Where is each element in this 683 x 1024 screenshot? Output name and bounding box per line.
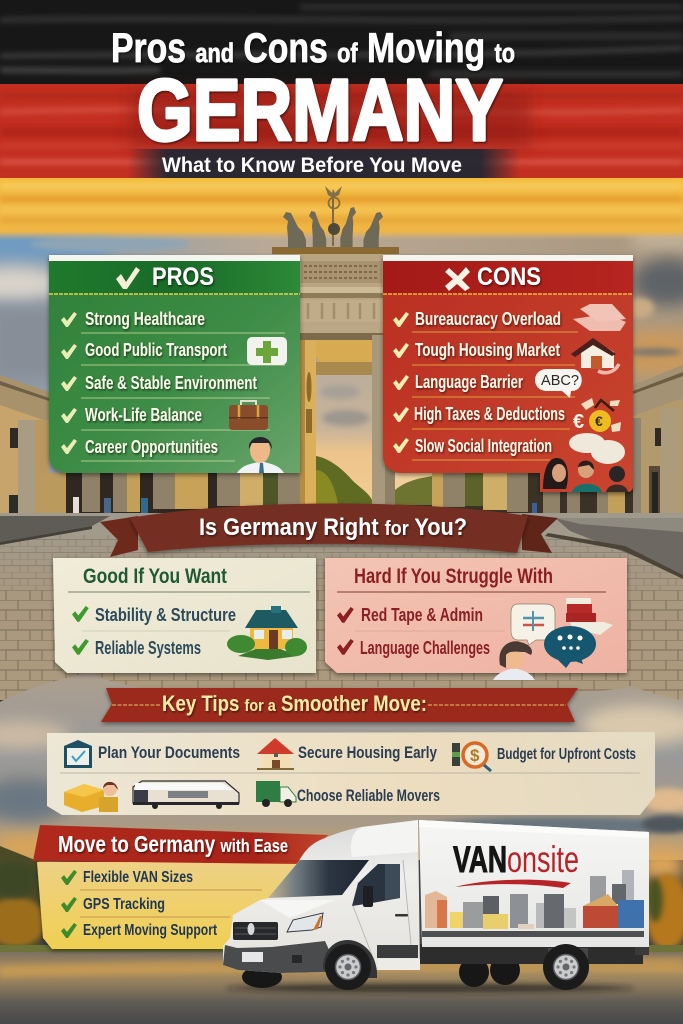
cons list: Slow Social Integration — [415, 436, 552, 456]
truck: hood crease — [260, 900, 335, 918]
truck: skyline graphic — [425, 870, 644, 929]
truck: mirror — [363, 886, 373, 907]
panel: pros — [49, 255, 300, 473]
icon: briefcase — [229, 401, 268, 430]
background: colonnade at the base of the gate — [40, 473, 633, 518]
tip: budget for upfront costs — [452, 743, 636, 771]
cons list: High Taxes & Deductions — [414, 404, 565, 424]
background: right colonnade building — [633, 365, 683, 518]
ribbon: key tips heading: Key Tips for a Smoother Move: — [162, 691, 427, 716]
icon: ABC speech bubble — [535, 369, 582, 398]
icon: house — [571, 338, 619, 373]
truck: ground shadow — [225, 984, 635, 992]
icon: long truck — [133, 781, 239, 809]
background: cobblestone plaza and road — [0, 513, 683, 700]
good list: Stability & Structure — [95, 605, 236, 625]
background: road — [0, 945, 683, 1024]
icon: professional man — [237, 437, 284, 473]
truck: cargo box — [419, 820, 649, 947]
tip: plan your documents: Plan Your Documents — [98, 743, 240, 762]
truck: front bumper — [223, 941, 330, 973]
icon: stack of papers — [573, 304, 626, 331]
icon: ABC speech bubble: ABC? — [541, 372, 579, 389]
truck: logo — [453, 839, 579, 888]
background: autumn trees — [0, 846, 683, 950]
icon: language bubbles and books — [511, 598, 613, 668]
icon: euro coins and arrows: € — [573, 411, 584, 433]
truck: front wheel — [325, 944, 371, 990]
hard list: Red Tape & Admin — [361, 605, 483, 625]
ribbon: key tips heading — [101, 688, 578, 722]
icon: house with garden — [227, 601, 307, 660]
truck: windshield — [268, 860, 369, 898]
panel: cons — [383, 255, 633, 492]
panel heading: Move to Germany with Ease — [58, 831, 288, 857]
background: lower clouds — [0, 672, 683, 880]
hard heading: Hard If You Struggle With — [354, 565, 553, 588]
tip: choose reliable movers — [256, 781, 440, 807]
cons list: Language Barrier — [415, 372, 523, 392]
background: German flag bands — [0, 0, 683, 240]
icon: medical plus card — [247, 337, 287, 365]
icon: euro coins and arrows: € — [595, 413, 603, 429]
pros heading: PROS — [152, 263, 214, 291]
panel: key tips — [47, 732, 655, 815]
service list — [61, 869, 262, 939]
pros list: Work-Life Balance — [85, 405, 202, 425]
icon: people talking — [543, 433, 628, 492]
pros list — [61, 309, 285, 461]
truck: door lines — [353, 860, 412, 955]
title: first line: Pros and Cons of Moving to — [111, 24, 515, 71]
panel: hard if you struggle with — [325, 558, 627, 680]
truck: grille — [233, 922, 278, 940]
icon: euro coins and arrows — [573, 398, 621, 433]
people at the colonnade — [73, 497, 537, 518]
hard list — [337, 605, 490, 658]
pros heading — [116, 263, 214, 291]
title: GERMANY: GERMANY — [137, 62, 503, 159]
cons list: Bureaucracy Overload — [415, 309, 561, 329]
tip: budget for upfront costs: Budget for Upfront Costs — [497, 746, 636, 763]
panel: good if you want — [53, 558, 316, 673]
title block — [111, 24, 520, 178]
truck: logo: VAN — [453, 839, 507, 880]
banner: Is Germany Right for You? — [100, 503, 558, 557]
truck: chassis — [415, 944, 649, 964]
truck: far wheels — [242, 955, 520, 988]
tip: choose reliable movers: Choose Reliable Movers — [297, 786, 440, 805]
service list: Flexible VAN Sizes — [83, 869, 193, 886]
truck: wheel arch — [323, 940, 377, 978]
panel: move to Germany with ease — [33, 825, 328, 949]
icon: quadriga statue on the gate — [272, 186, 399, 254]
tip: budget for upfront costs: $ — [470, 746, 480, 765]
background: Brandenburg Gate — [300, 254, 395, 504]
tip: plan your documents — [64, 740, 240, 768]
truck: rear wheel — [543, 944, 589, 990]
pros list: Strong Healthcare — [85, 309, 205, 329]
subtitle: What to Know Before You Move — [162, 154, 462, 177]
truck: logo: onsite — [507, 839, 579, 880]
cons list: Tough Housing Market — [415, 340, 560, 360]
icon: boxes and person — [64, 782, 118, 812]
panel heading ribbon — [33, 825, 328, 864]
pros list: Career Opportunities — [85, 437, 218, 457]
service list: GPS Tracking — [83, 896, 165, 913]
truck: cab — [223, 820, 420, 978]
pros list: Good Public Transport — [85, 340, 227, 360]
hard list: Language Challenges — [360, 638, 490, 658]
tip: secure housing early — [257, 738, 437, 770]
good heading: Good If You Want — [83, 565, 227, 588]
cons list — [393, 309, 578, 460]
truck: side window — [352, 864, 400, 906]
pros list: Safe & Stable Environment — [85, 373, 257, 393]
good list — [72, 605, 236, 658]
banner: Is Germany Right for You?: Is Germany Right for You? — [199, 514, 467, 541]
illustration: VANonsite moving truck — [223, 820, 649, 992]
subtitle pill — [128, 149, 520, 178]
background: left colonnade building — [0, 375, 49, 519]
cons heading — [445, 263, 541, 291]
cons heading: CONS — [477, 263, 541, 291]
truck: headlight — [287, 913, 323, 932]
service list: Expert Moving Support — [83, 922, 218, 939]
background: sky and clouds behind the gate — [0, 224, 683, 520]
good list: Reliable Systems — [95, 638, 201, 658]
tip: secure housing early: Secure Housing Early — [298, 743, 437, 762]
icon: person — [493, 641, 535, 680]
